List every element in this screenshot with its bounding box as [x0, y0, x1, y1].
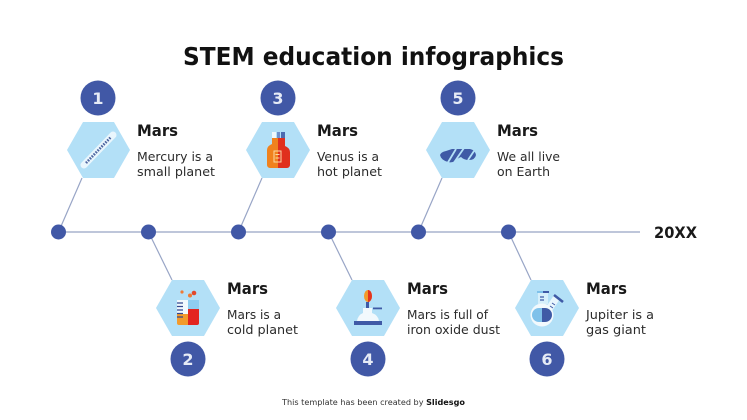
number badge 1: [80, 80, 116, 116]
step 5: [426, 80, 560, 179]
step 1: [67, 80, 215, 179]
icon: flask: [530, 291, 563, 326]
text: step 2: cold planet: [227, 323, 298, 337]
number badge 2: [170, 342, 206, 376]
number badge 2: 2: [182, 350, 194, 369]
hexagon 1: [67, 122, 130, 178]
text: step 6: Mars: [586, 279, 627, 298]
footer credit: This template has been created by Slidesgo: [281, 398, 465, 407]
text: step 3: hot planet: [317, 165, 382, 179]
text: step 2: Mars: [227, 279, 268, 298]
number badge 6: 6: [541, 350, 553, 369]
number badge 4: 4: [362, 350, 374, 369]
text: step 5: Mars: [497, 121, 538, 140]
icon: goggles: [440, 148, 476, 164]
icon: bottle: [267, 132, 290, 168]
timeline: [51, 178, 640, 280]
timeline label: 20XX: [654, 223, 698, 242]
hexagon 5: [426, 122, 490, 178]
step 6: [515, 279, 654, 376]
number badge 4: [350, 342, 386, 376]
text: step 5: [497, 121, 560, 179]
hexagon 6: [515, 280, 579, 336]
text: step 3: Venus is a: [317, 150, 379, 164]
text: step 2: [227, 279, 298, 337]
text: step 6: gas giant: [586, 323, 646, 337]
number badge 5: 5: [452, 89, 464, 108]
icon: beaker: [177, 290, 199, 325]
text: step 6: [585, 279, 654, 337]
text: step 2: Mars is a: [227, 308, 281, 322]
text: step 1: Mercury is a: [137, 150, 213, 164]
text: step 1: Mars: [137, 121, 178, 140]
text: step 4: Mars is full of: [407, 308, 489, 322]
text: step 5: on Earth: [497, 165, 550, 179]
hexagon 3: [246, 122, 310, 178]
step 4: [336, 279, 500, 376]
number badge 1: 1: [92, 89, 104, 108]
number badge 3: 3: [272, 89, 284, 108]
text: step 4: iron oxide dust: [407, 323, 500, 337]
text: step 1: [137, 121, 215, 179]
text: step 4: Mars: [407, 279, 448, 298]
text: step 5: We all live: [497, 150, 560, 164]
text: step 3: Mars: [317, 121, 358, 140]
text: step 4: [407, 279, 500, 337]
step 3: [246, 80, 382, 179]
hexagon 2: [156, 280, 220, 336]
text: step 6: Jupiter is a: [585, 308, 654, 322]
icon: burner: [354, 290, 382, 325]
hexagon 4: [336, 280, 400, 336]
text: step 3: [317, 121, 382, 179]
text: step 1: small planet: [137, 165, 215, 179]
step 2: [156, 279, 298, 376]
icon: thermometer: [84, 135, 113, 165]
title: STEM education infographics: [183, 42, 564, 71]
